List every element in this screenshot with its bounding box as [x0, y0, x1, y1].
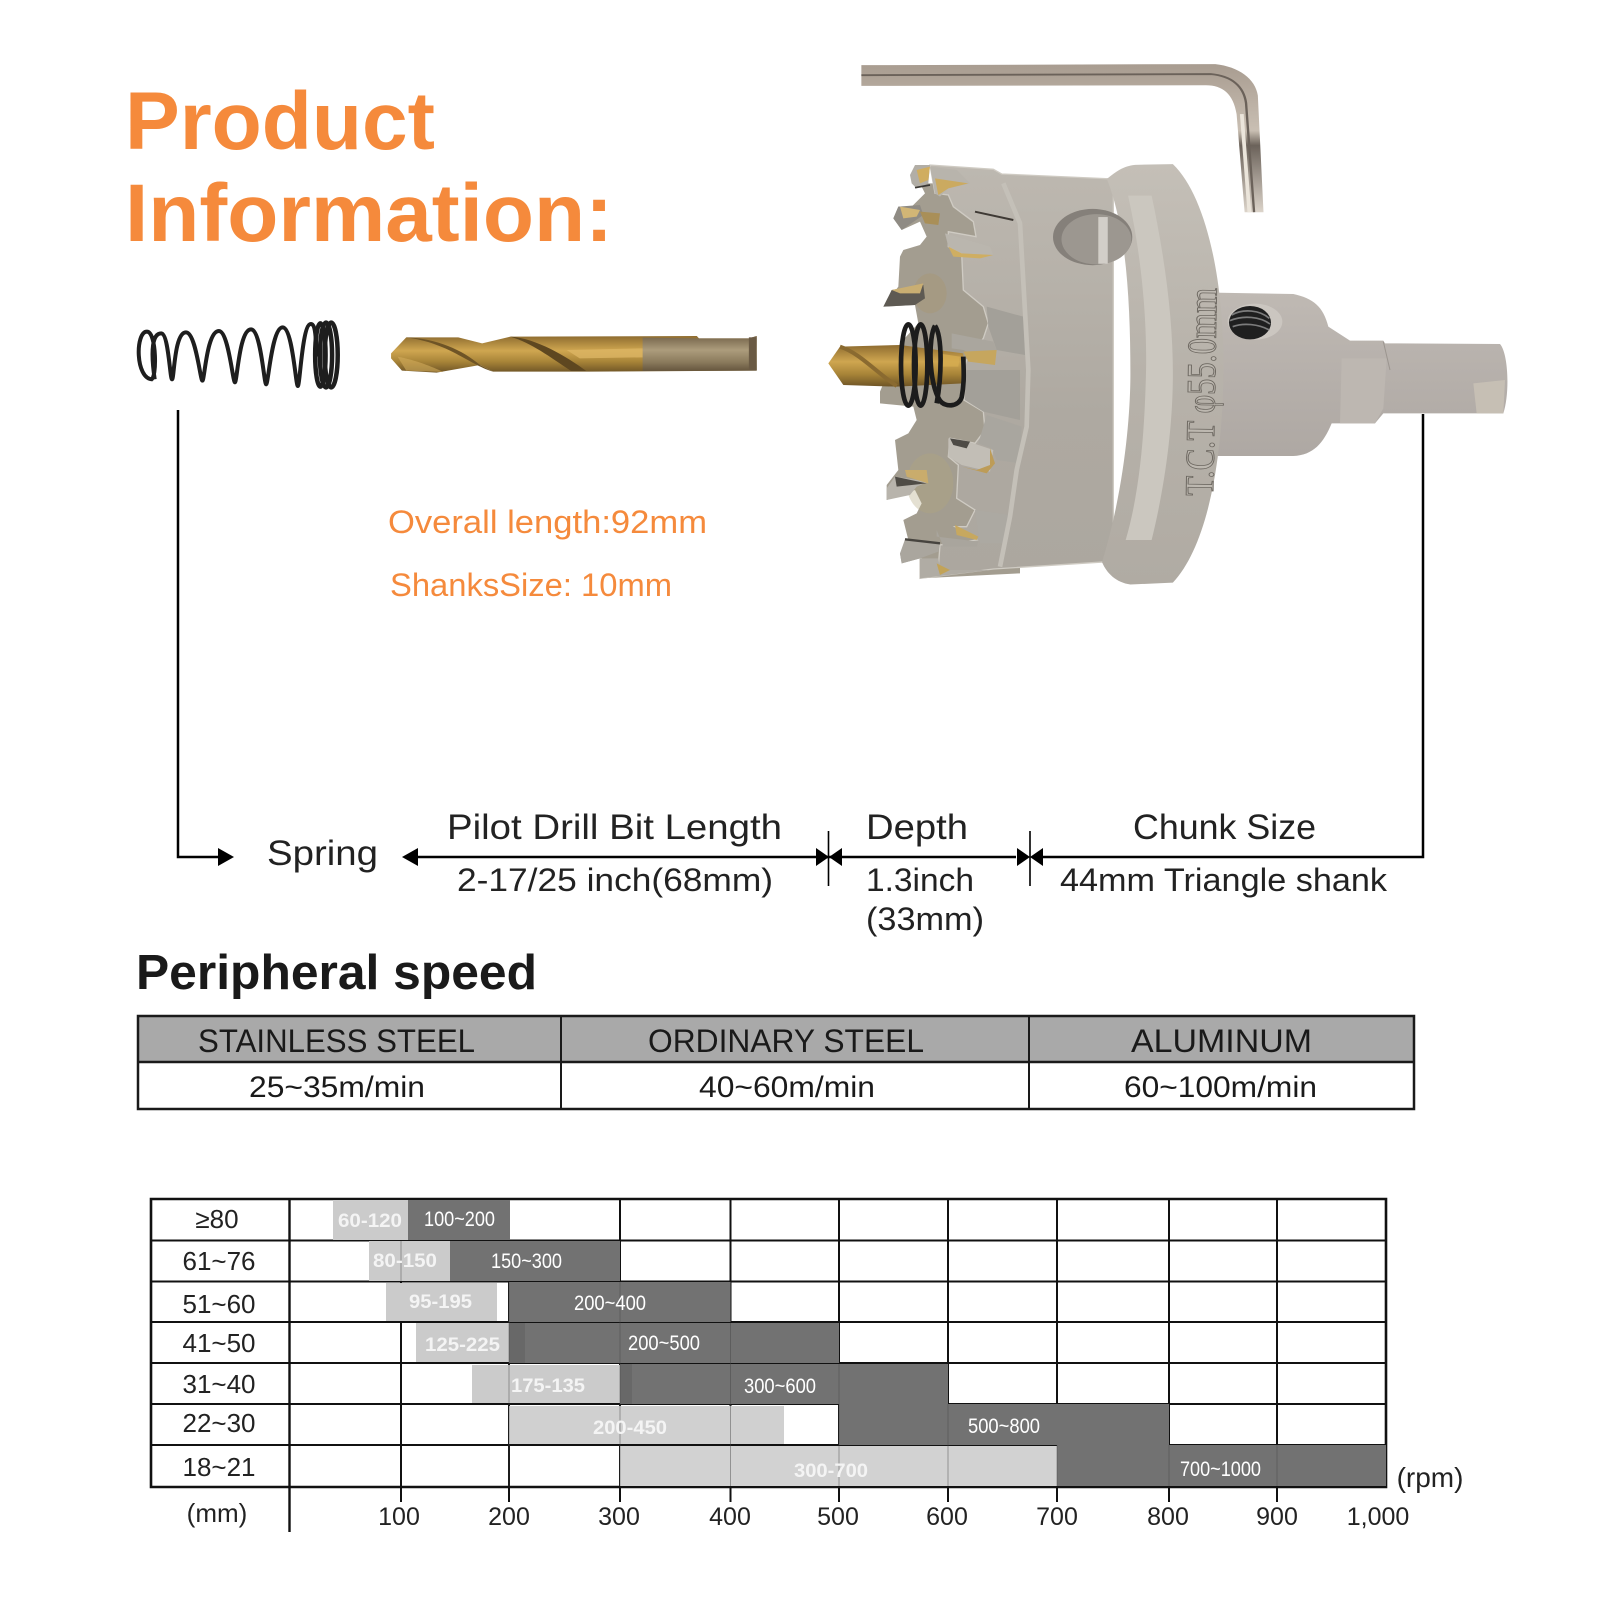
dark bar values: 200~500 [628, 1332, 700, 1355]
title: Information: [125, 168, 613, 259]
light bar values: 60-120 [338, 1211, 402, 1232]
dark speed bars [408, 1200, 1386, 1486]
rpm axis labels: 100 [378, 1503, 420, 1531]
carbide teeth [828, 165, 997, 578]
rpm axis labels: 500 [817, 1503, 859, 1531]
dark bar values: 700~1000 [1180, 1458, 1261, 1481]
table: peripheral speed: STAINLESS STEEL [198, 1023, 475, 1059]
rpm axis labels: 900 [1256, 1503, 1298, 1531]
dark bar values: 300~600 [744, 1375, 816, 1398]
diameter labels: ≥80 [195, 1204, 239, 1234]
light bar values: 175-135 [511, 1376, 585, 1397]
rpm axis labels: 800 [1147, 1503, 1189, 1531]
table: peripheral speed: ORDINARY STEEL [648, 1023, 924, 1059]
light bar values: 80-150 [373, 1251, 437, 1272]
slot line [975, 212, 1013, 220]
dimension labels: 1.3inch [866, 862, 974, 898]
rpm axis labels: (rpm) [1397, 1462, 1463, 1493]
diameter labels: 18~21 [182, 1452, 256, 1482]
table: peripheral speed: 60~100m/min [1124, 1071, 1317, 1104]
diameter labels: 22~30 [182, 1408, 256, 1438]
icon: hole saw assembly [828, 164, 1507, 584]
heading: peripheral speed: Peripheral speed [136, 946, 537, 1000]
lightening hole [1053, 209, 1132, 265]
rpm axis labels: 1,000 [1347, 1503, 1409, 1531]
dimension labels: Pilot Drill Bit Length [447, 808, 782, 847]
light bar values: 125-225 [425, 1335, 500, 1356]
diameter labels [182, 1204, 256, 1528]
rpm axis labels: 200 [488, 1503, 530, 1531]
light speed bars [333, 1200, 1057, 1486]
dark bar values [424, 1208, 1261, 1481]
rpm axis labels: 700 [1036, 1503, 1078, 1531]
chart: rpm by hole diameter [151, 1199, 1463, 1532]
light bar values [338, 1211, 868, 1482]
diameter labels: (mm) [187, 1498, 247, 1528]
dimension lines and arrows [178, 410, 1423, 886]
chart grid [151, 1199, 1386, 1532]
spring on drill [901, 324, 964, 406]
dark bar values: 100~200 [424, 1208, 495, 1231]
rpm axis labels: 300 [598, 1503, 640, 1531]
dimension labels: (33mm) [866, 901, 984, 937]
tooth segments [965, 307, 1025, 543]
table: peripheral speed: 25~35m/min [249, 1071, 425, 1104]
arbor shank [1213, 293, 1507, 456]
text: drill specs [388, 504, 707, 603]
light bar values: 200-450 [593, 1418, 667, 1439]
machined shoulder highlight [1000, 183, 1028, 567]
dimension labels: Depth [866, 808, 968, 847]
dark bar values: 150~300 [491, 1250, 562, 1273]
dimension labels: 2-17/25 inch(68mm) [457, 862, 773, 898]
dimension labels: Chunk Size [1133, 808, 1316, 847]
icon: spring [139, 323, 338, 387]
diameter labels: 41~50 [182, 1328, 256, 1358]
diameter labels: 31~40 [182, 1369, 256, 1399]
inner face [880, 183, 1020, 578]
rpm axis labels [378, 1462, 1463, 1531]
light bar values: 95-195 [409, 1292, 472, 1313]
dark bar values: 200~400 [574, 1292, 646, 1315]
title: Product [125, 76, 435, 167]
table: peripheral speed [137, 1016, 1414, 1109]
rpm axis labels: 400 [709, 1503, 751, 1531]
diameter labels: 51~60 [182, 1289, 256, 1319]
cup body [920, 165, 1113, 578]
cup and cutting face [880, 165, 1113, 578]
table: peripheral speed: ALUMINUM [1131, 1023, 1312, 1059]
text: drill specs: Overall length:92mm [388, 504, 707, 540]
rpm axis labels: 600 [926, 1503, 968, 1531]
text: drill specs: ShanksSize: 10mm [390, 567, 672, 603]
dark bar values: 500~800 [968, 1415, 1040, 1438]
pilot drill tip [828, 345, 963, 387]
icon: hex key wrench [861, 64, 1264, 212]
flange highlight band [1126, 196, 1173, 540]
title [125, 76, 613, 259]
table: peripheral speed: 40~60m/min [699, 1071, 875, 1104]
dimension labels: Spring [267, 834, 378, 873]
diameter labels: 61~76 [182, 1246, 256, 1276]
dimension labels [267, 808, 1388, 937]
flange and hole [1053, 164, 1223, 584]
set screw hole [1228, 304, 1282, 340]
dimension labels: 44mm Triangle shank [1060, 862, 1388, 898]
embossed size marking: T.C.T φ55.0mm [1176, 287, 1226, 496]
icon: pilot drill bit [391, 336, 757, 373]
light bar values: 300-700 [794, 1461, 868, 1482]
grid showing through bars [401, 1241, 1277, 1486]
